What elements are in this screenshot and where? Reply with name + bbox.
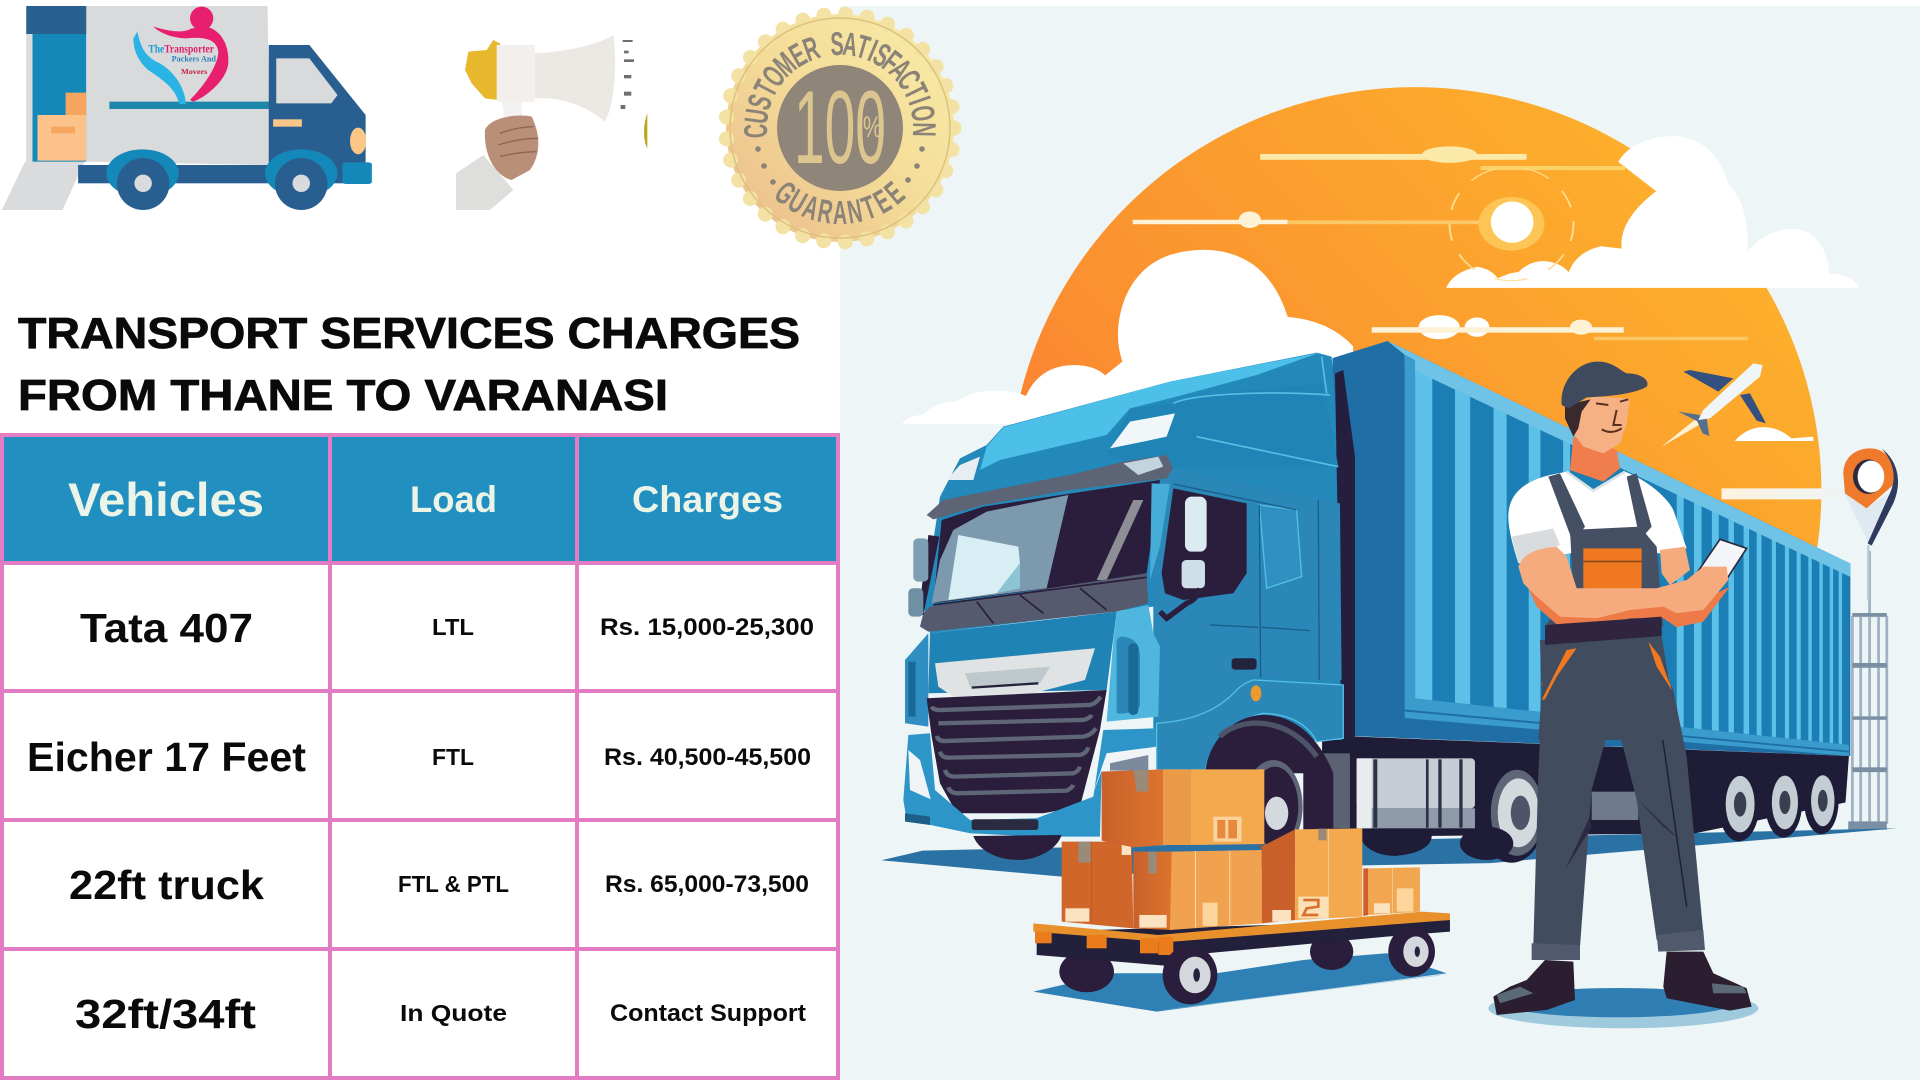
trousers (1533, 640, 1703, 947)
map pin (1843, 448, 1898, 600)
seal ring text: F (876, 43, 908, 80)
seal ring text: T (746, 74, 785, 102)
charge values: Rs. 65,000-73,500 (605, 871, 809, 898)
van box body (86, 6, 270, 165)
hair (1565, 399, 1591, 437)
chassis (78, 165, 347, 183)
header labels: Load (410, 479, 497, 520)
seal ring text: O (903, 102, 943, 124)
seal ring text: C (736, 123, 775, 139)
chassis (1322, 735, 1849, 837)
rear wheels (1360, 763, 1839, 863)
container (1332, 341, 1850, 758)
back wheels (1059, 933, 1353, 992)
seal ring text: I (901, 92, 939, 109)
front panel (928, 612, 1117, 693)
worker shadow (1488, 988, 1758, 1028)
cab door strip (273, 119, 302, 127)
glare edge (997, 563, 1020, 593)
tank gap (1592, 792, 1638, 820)
rear window (1259, 505, 1302, 588)
hand (485, 115, 538, 180)
sky and truck body layer (881, 87, 1897, 893)
header labels (68, 473, 783, 526)
fender recess (1117, 637, 1140, 714)
cart deck (1033, 912, 1450, 942)
body (497, 45, 535, 102)
stripe (109, 102, 269, 109)
seal ring text: N (906, 122, 943, 137)
load values: In Quote (400, 1000, 507, 1026)
dark post (1335, 370, 1355, 740)
door lines (1173, 484, 1319, 680)
sliver (644, 113, 647, 148)
tower (1848, 551, 1887, 830)
arm (1518, 547, 1728, 618)
windscreen glass (932, 495, 1068, 603)
seal ring text: A (841, 25, 860, 64)
logo services: Packers And (172, 55, 217, 64)
left boot toe (1497, 987, 1533, 1003)
right forearm (1660, 547, 1690, 585)
bib pocket (1583, 548, 1642, 593)
left headlight (908, 750, 931, 799)
title (18, 309, 800, 420)
van ramp (2, 162, 84, 210)
right cloud (1446, 136, 1859, 288)
lower roof panel (1107, 383, 1338, 468)
fender (1107, 605, 1160, 722)
roof lines (1173, 357, 1338, 467)
seal ring text: M (766, 45, 803, 84)
ground shadow (881, 828, 1897, 876)
sound marks (621, 40, 634, 109)
right box (1262, 828, 1362, 923)
headlight lens (1110, 755, 1148, 771)
fuel tank (1322, 753, 1513, 860)
front trim (935, 648, 1095, 697)
seal ring text: S (740, 90, 780, 114)
marker light (1251, 685, 1261, 701)
charge values: Rs. 40,500-45,500 (604, 744, 811, 771)
seal guarantee text: A (833, 194, 847, 231)
cart shadow edge (1157, 974, 1447, 1011)
sun disc (1020, 87, 1822, 548)
cuffs (1532, 930, 1705, 960)
worker torso and scene props (1508, 362, 1898, 740)
neck (1570, 437, 1620, 482)
truck cab (903, 353, 1355, 860)
airplane (1662, 363, 1766, 447)
cap (1561, 362, 1647, 408)
cone (535, 35, 615, 122)
wheels (106, 149, 338, 210)
wheel arch (1205, 715, 1333, 830)
charge values (600, 614, 814, 1027)
charge values: Rs. 15,000-25,300 (600, 614, 814, 641)
cart shadow (1033, 953, 1447, 1012)
seal guarantee text: T (857, 188, 881, 227)
top box (1102, 769, 1264, 847)
seal centre (777, 65, 903, 191)
load values: FTL & PTL (398, 871, 509, 897)
vehicle names (27, 605, 306, 1037)
middle box (1133, 850, 1262, 930)
vehicle names: Eicher 17 Feet (27, 734, 306, 780)
seal ring text: S (830, 25, 844, 63)
right headlight (1090, 747, 1157, 802)
grille slats (932, 697, 1101, 793)
panel: illustration background (840, 6, 1920, 1080)
face (1565, 397, 1630, 453)
load values: FTL (432, 744, 474, 770)
small sun (1449, 167, 1573, 281)
shirt (1508, 472, 1687, 563)
left marker lamp (947, 457, 980, 480)
eyes and mouth (1596, 399, 1628, 432)
fender slot (1128, 643, 1138, 715)
trouser shading (1565, 673, 1687, 907)
front tyre (973, 835, 1062, 860)
seal ring text: I (863, 32, 883, 69)
logo van (2, 6, 372, 210)
logo movers: Movers (181, 67, 207, 76)
cab window (276, 58, 338, 103)
left panel (905, 633, 928, 727)
pocket trims (1542, 642, 1672, 700)
seal guarantee text: U (782, 181, 813, 221)
yellow back (465, 40, 500, 100)
seal guarantee text: E (867, 182, 897, 221)
hips (1538, 636, 1683, 740)
fingers (498, 127, 538, 157)
seal badge (726, 14, 954, 242)
lower left box (1062, 842, 1133, 928)
collar (1567, 472, 1625, 491)
table grid (2, 435, 838, 1078)
table header (2, 433, 838, 564)
table (2, 433, 838, 1078)
seal guarantee text (768, 173, 911, 231)
handle (502, 102, 522, 120)
title: FROM THANE TO VARANASI (18, 371, 668, 420)
header labels: Charges (632, 479, 783, 520)
logo mark (133, 7, 228, 104)
trim inset (965, 667, 1050, 687)
left boot (1493, 960, 1575, 1015)
a pillar (1097, 500, 1143, 580)
header labels: Vehicles (68, 473, 264, 526)
megaphone (456, 35, 647, 210)
bumper (342, 162, 372, 184)
vehicle names: 32ft/34ft (75, 991, 256, 1037)
small box (1363, 867, 1420, 916)
a pillar side (1150, 483, 1170, 580)
seal disc (726, 14, 954, 242)
straps (1548, 473, 1652, 543)
seal ring text: T (896, 77, 936, 105)
windscreen interior (933, 480, 1160, 603)
sun streaks (1133, 146, 1846, 499)
title: TRANSPORT SERVICES CHARGES (18, 309, 800, 358)
door handle (1232, 658, 1257, 670)
van interior (26, 6, 87, 162)
pocket trims (1542, 643, 1672, 700)
cart and boxes (1033, 769, 1450, 1012)
load values: LTL (432, 614, 474, 640)
seal guarantee text: E (877, 174, 911, 211)
right boot (1663, 952, 1752, 1011)
small cloud (1735, 427, 1813, 441)
cuff (456, 155, 513, 210)
windscreen glare (948, 535, 1020, 600)
grille (927, 690, 1107, 813)
seal ring text: T (852, 27, 875, 67)
cab shell (923, 353, 1343, 770)
seal ring text: U (737, 107, 776, 126)
van cab (269, 45, 366, 183)
sleeve shade (1512, 528, 1560, 563)
arch highlight (1220, 723, 1317, 757)
door window (1162, 488, 1247, 600)
seal ring text (736, 25, 943, 139)
charge values: Contact Support (610, 1000, 806, 1027)
left cloud (902, 250, 1353, 424)
wiper lines (933, 577, 1147, 623)
side sill window band (1152, 468, 1342, 723)
heart figure (153, 7, 228, 102)
seal ring text: A (882, 51, 919, 87)
cab mirror (1160, 497, 1207, 618)
front mirrors (908, 535, 939, 617)
sun visor (927, 455, 1173, 519)
left slot (908, 662, 916, 717)
worker legs (1488, 640, 1758, 1028)
arm shadow (1518, 567, 1730, 627)
wiper frame (920, 573, 1148, 632)
lower sill (1157, 680, 1343, 770)
bumper (903, 728, 1157, 837)
tablet (1677, 539, 1747, 605)
seal guarantee text: A (798, 187, 824, 227)
seal dots (755, 146, 925, 185)
seal percent: % (863, 112, 882, 144)
headlight (350, 128, 366, 154)
seal guarantee text: R (815, 191, 836, 231)
front wheel (1244, 760, 1303, 853)
seal ring (730, 18, 950, 238)
deck posts (1035, 932, 1173, 955)
vehicle names: Tata 407 (80, 605, 253, 651)
seal ring text: R (798, 28, 824, 69)
blue hand (133, 32, 186, 104)
seal guarantee text: G (768, 173, 804, 212)
logo name: TheTransporter (148, 44, 214, 56)
seal ring text: C (890, 63, 929, 96)
front wheels (1163, 927, 1435, 1004)
seal 100: 100 (794, 69, 886, 185)
load values (398, 614, 509, 1026)
seal ring text: S (867, 35, 897, 74)
roof lamp (1110, 413, 1175, 448)
vehicle names: 22ft truck (69, 862, 264, 908)
bumper slots (905, 813, 1038, 830)
right boot toe (1712, 983, 1747, 993)
visor end (1123, 457, 1163, 475)
trim slot (972, 683, 1038, 688)
bib (1545, 527, 1663, 633)
seal ring text: E (783, 35, 813, 74)
roof highlight (980, 353, 1320, 470)
cart frame (1037, 920, 1450, 967)
belt (1545, 617, 1662, 647)
seal guarantee text: N (844, 191, 865, 231)
seal ring text: O (754, 58, 793, 94)
